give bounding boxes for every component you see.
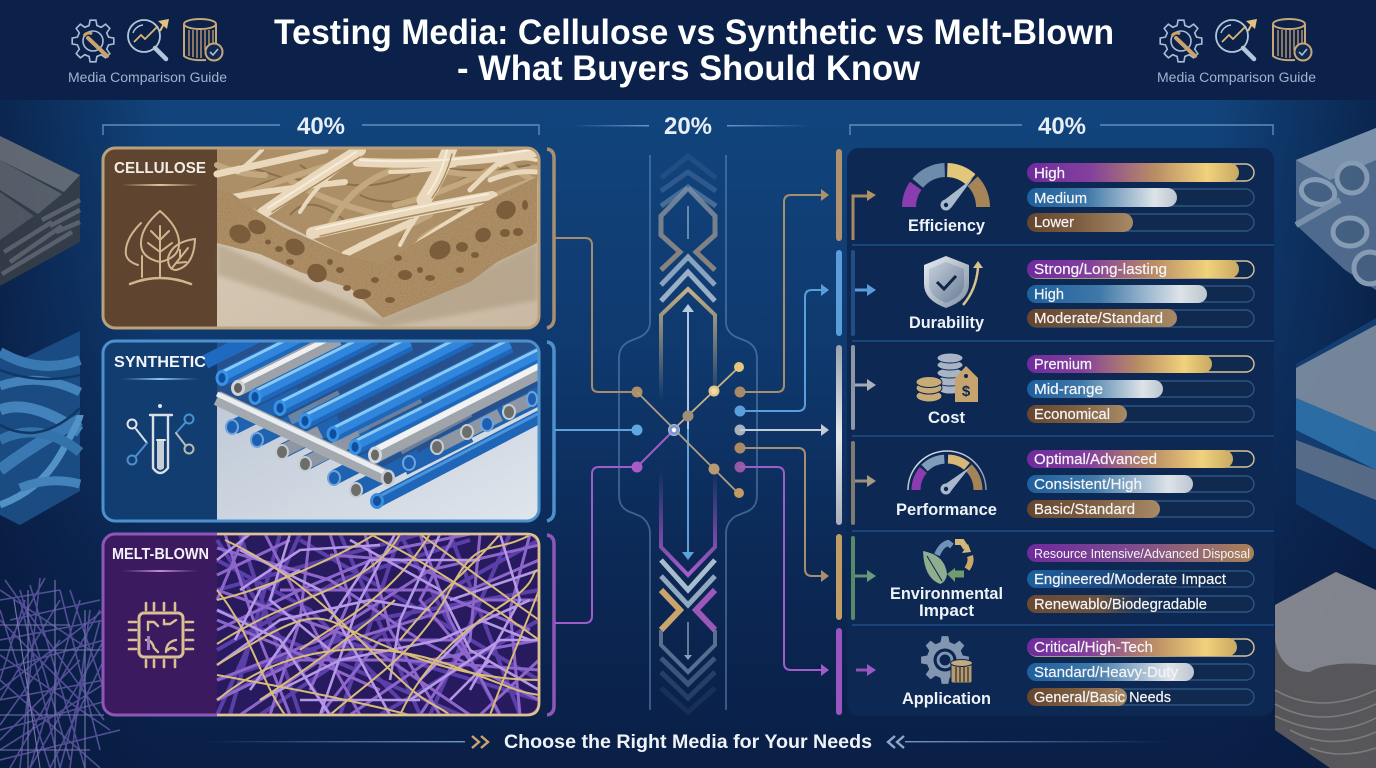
- icon: leaf with recycle arrows: [923, 542, 971, 584]
- bar: premium: Premium: [1034, 357, 1092, 373]
- hub crossing lines and dots: [637, 362, 744, 498]
- outer accent bars: [836, 149, 842, 715]
- bar: lower: Lower: [1034, 215, 1074, 231]
- percent header: left 40%: [103, 113, 539, 140]
- purple fibre web: [0, 578, 120, 768]
- side art: left materials: [0, 136, 120, 768]
- bar: basic: Basic/Standard: [1034, 502, 1135, 518]
- percent header: centre 20%: 20%: [664, 113, 712, 140]
- panel: cellulose: [103, 148, 554, 328]
- bar: optimal: Optimal/Advanced: [1034, 452, 1157, 468]
- row: cost: Cost: [928, 408, 965, 427]
- bar: high: [1027, 163, 1254, 182]
- layered mesh slab: [1296, 318, 1376, 550]
- upper tubes: [202, 342, 538, 464]
- bar: consistent: Consistent/High: [1034, 477, 1142, 493]
- bar: basic: [1027, 500, 1254, 518]
- bottom chevron stack: [661, 470, 715, 712]
- bar: moderate: Moderate/Standard: [1034, 311, 1163, 327]
- bar: medium: Medium: [1034, 191, 1087, 207]
- row: durability: [851, 250, 1254, 336]
- metal rail and mid layer: [290, 395, 470, 450]
- branch arrow: [851, 536, 876, 620]
- label: SYNTHETIC: [114, 354, 206, 371]
- small arrowhead: [684, 655, 692, 660]
- connector: synthetic: [555, 424, 642, 436]
- bar: standard: [1027, 663, 1254, 681]
- icon: filter cartridge with check: [1273, 19, 1312, 60]
- row: efficiency: Efficiency: [908, 216, 986, 235]
- melt-blown fibre photo: [217, 530, 539, 715]
- percent header: left 40%: 40%: [297, 113, 345, 140]
- grey pleated slab: [0, 136, 80, 286]
- row: cost: [851, 345, 1254, 430]
- pleated tubes: [1296, 128, 1376, 290]
- connectors from hub to criteria: [734, 189, 829, 676]
- branch arrow: [851, 250, 876, 336]
- row: performance: Performance: [896, 500, 997, 519]
- panel: synthetic: [103, 323, 554, 521]
- icon: gear with wrench: [72, 20, 114, 62]
- blue fibre mat: [0, 331, 80, 525]
- icon: gauge: [909, 170, 983, 210]
- bar: premium: [1027, 355, 1254, 373]
- bar: strong: [1027, 260, 1254, 278]
- bar: mid-range: [1027, 380, 1254, 398]
- header band: [0, 0, 1376, 100]
- paper stack: [1275, 572, 1376, 768]
- label: CELLULOSE: [114, 160, 206, 177]
- bar: renewable: Renewablo/Biodegradable: [1034, 597, 1207, 613]
- bar: critical: [1027, 638, 1254, 656]
- icon: gear with filter: [921, 636, 972, 684]
- bar: resource intensive: Resource Intensive/Advanced Disposal: [1034, 547, 1250, 561]
- icon: leaves: [126, 211, 195, 284]
- bar: general: General/Basic Needs: [1034, 690, 1171, 706]
- icon: shield: [924, 256, 983, 308]
- lower tubes: [225, 391, 545, 509]
- footer call to action: [205, 732, 1170, 753]
- bar: moderate: [1027, 309, 1254, 327]
- row: efficiency: [853, 163, 1254, 240]
- bar: renewable: [1027, 595, 1254, 613]
- arrow: to efficiency: [734, 189, 829, 398]
- vertical flow arrows: [682, 304, 694, 560]
- branch arrow: [851, 441, 876, 525]
- left header icons: [68, 19, 227, 85]
- arrow: to durability: [734, 284, 829, 416]
- bar: high: High: [1034, 287, 1064, 303]
- label: [890, 584, 1003, 620]
- branch arrow: [856, 664, 876, 676]
- bar: mid-range: Mid-range: [1034, 382, 1103, 398]
- title: - What Buyers Should Know: [457, 49, 921, 88]
- bar: critical: Critical/High-Tech: [1034, 640, 1153, 656]
- connector: cellulose: [555, 238, 642, 398]
- side art: right materials: [1275, 128, 1376, 768]
- bar: general: [1027, 688, 1254, 706]
- label: Environmental: [890, 584, 1003, 603]
- bar: strong: Strong/Long-lasting: [1034, 262, 1167, 278]
- icon: microchip: [129, 603, 193, 667]
- icon: gear with wrench: [1160, 20, 1202, 62]
- caption: Media Comparison Guide: [68, 70, 227, 85]
- icon: gauge with rim: [908, 451, 986, 494]
- connector: melt-blown: [555, 462, 642, 623]
- panel: melt-blown: [103, 530, 554, 715]
- bar: lower: [1027, 213, 1254, 232]
- caption: Media Comparison Guide: [1157, 70, 1316, 85]
- row: performance: [851, 441, 1254, 525]
- icon: test tube with nodes: [128, 404, 194, 473]
- right header icons: [1157, 19, 1316, 85]
- dark layer behind tubes: [217, 341, 539, 478]
- panel: comparison criteria: [847, 148, 1274, 716]
- bar: consistent: [1027, 475, 1254, 493]
- connectors from media cards to hub: [555, 238, 642, 623]
- bracket: [547, 149, 554, 328]
- branch arrow: [851, 345, 876, 430]
- bar: standard: Standard/Heavy-Duty: [1034, 665, 1179, 681]
- bar: medium: [1027, 188, 1254, 207]
- bar: engineered: Engineered/Moderate Impact: [1034, 572, 1226, 588]
- icon: filter cartridge with check: [184, 19, 222, 60]
- bar: high: [1027, 285, 1254, 303]
- arrow: to application: [734, 462, 829, 676]
- bar: optimal: [1027, 450, 1254, 468]
- icon: coins and tag: $: [962, 383, 971, 400]
- label: MELT-BLOWN: [112, 546, 209, 563]
- icon: coins and tag: [916, 353, 978, 402]
- top chevron stack: [661, 156, 716, 400]
- bar: economical: Economical: [1034, 407, 1110, 423]
- bracket: [547, 342, 554, 521]
- icon: magnifier with chart: [1216, 19, 1257, 59]
- bracket: [547, 535, 554, 715]
- title: [274, 13, 1114, 88]
- centre column: hourglass guides: [619, 155, 757, 712]
- percent header: right 40%: 40%: [1038, 113, 1086, 140]
- synthetic tubes photo: [202, 342, 538, 520]
- bar: high: High: [1034, 166, 1065, 182]
- cellulose photo: [217, 148, 539, 328]
- label: Impact: [919, 601, 974, 620]
- row: application: Application: [902, 689, 991, 708]
- title: Testing Media: Cellulose vs Synthetic vs Melt-Blown: [274, 13, 1114, 52]
- row: application: [856, 636, 1254, 708]
- row: durability: Durability: [909, 313, 985, 332]
- arrow: to cost: [734, 424, 829, 436]
- row: environmental impact: [851, 536, 1254, 620]
- percent header: right 40%: [850, 113, 1273, 140]
- icon: magnifier with chart: [128, 19, 169, 59]
- arrow: to environmental impact: [734, 442, 829, 582]
- branch arrow: [853, 190, 876, 240]
- footer call to action: Choose the Right Media for Your Needs: [504, 732, 872, 753]
- bar: economical: [1027, 405, 1254, 423]
